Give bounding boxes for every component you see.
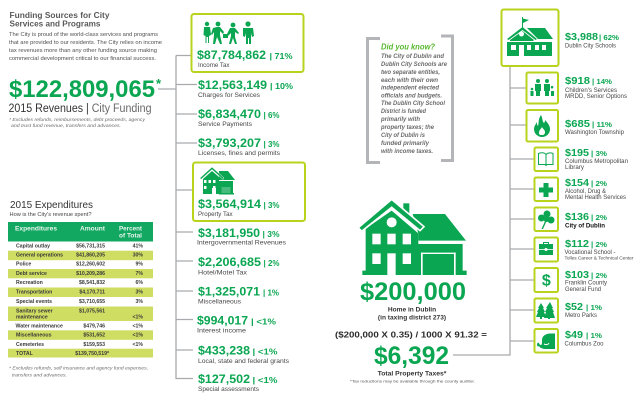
item: miscellaneous xyxy=(198,286,279,306)
row labels: TOTAL xyxy=(16,351,34,357)
row amounts: $1,075,561 xyxy=(79,308,105,314)
icon: shamrock xyxy=(538,210,554,229)
row labels xyxy=(16,244,63,357)
row labels: Special events xyxy=(16,299,52,305)
row labels: Sanitary sewer xyxy=(16,308,53,314)
item: service payments: Service Payments xyxy=(198,121,252,128)
row labels: Debt service xyxy=(16,271,47,277)
item: hotel motel tax: $2,206,685 xyxy=(198,256,262,269)
home description: Home in Dublin xyxy=(388,306,436,314)
item: children's services xyxy=(526,72,627,104)
property tax percent: | 3% xyxy=(264,200,280,210)
item: service payments: $6,834,470 xyxy=(198,108,261,121)
item: service payments xyxy=(198,108,280,128)
title: Services and Programs xyxy=(10,18,101,28)
icon: briefcase xyxy=(539,242,553,255)
item: interest income: $994,017 xyxy=(197,314,248,328)
total revenue figure: * xyxy=(156,76,162,91)
total property taxes value: $6,392 xyxy=(374,342,449,370)
callout body: each with their own xyxy=(381,78,438,84)
item: grants: $433,238 xyxy=(198,344,251,358)
icon: plus xyxy=(539,183,553,197)
row percents: 3% xyxy=(136,299,143,305)
revenue footnote: and trust fund revenue, transfers and advances. xyxy=(11,123,121,129)
property tax label: Property Tax xyxy=(198,211,234,218)
item: grants: | <1% xyxy=(252,346,278,356)
income tax percent: | 71% xyxy=(270,51,293,61)
item: charges for services: $12,563,149 xyxy=(198,79,268,92)
item: interest income xyxy=(197,314,276,334)
callout body: two separate entities, xyxy=(381,70,440,76)
row amounts: $10,209,286 xyxy=(76,271,105,277)
formula: ($200,000 X 0.35) / 1000 X 91.32 = xyxy=(335,330,487,340)
row percents: 9% xyxy=(136,262,143,268)
row percents: 41% xyxy=(133,244,143,250)
item: vocational school xyxy=(534,238,634,262)
item: dublin city schools: | 62% xyxy=(599,35,620,42)
row percents: 6% xyxy=(136,280,143,286)
item: metro parks: $52 xyxy=(565,302,583,313)
item: miscellaneous: Miscellaneous xyxy=(198,298,241,306)
expenditures heading xyxy=(10,199,93,218)
item: franklin county: General Fund xyxy=(565,286,602,293)
item: columbus metropolitan library: $195 xyxy=(565,148,589,159)
intro text block: tax revenues more than any other funding source making xyxy=(9,48,157,54)
panel: property tax xyxy=(193,162,305,221)
item: columbus metropolitan library: | 3% xyxy=(591,151,608,158)
row labels: Transportation xyxy=(16,290,52,296)
row labels: General operations xyxy=(16,252,63,258)
item: city of dublin: $136 xyxy=(565,212,589,223)
expenditures heading: How is the City's revenue spent? xyxy=(10,212,92,218)
callout heading: Did you know? xyxy=(381,42,435,52)
item: city of dublin: City of Dublin xyxy=(565,222,605,230)
item: charges for services: | 10% xyxy=(270,81,293,91)
item: special assessments: $127,502 xyxy=(198,373,250,386)
item: vocational school: $112 xyxy=(565,239,589,250)
item: alcohol drug mental health: | 2% xyxy=(591,181,608,188)
icon: elephant xyxy=(537,334,555,349)
icon: house xyxy=(200,167,235,194)
expenditures heading: 2015 Expenditures xyxy=(10,199,93,211)
item: columbus zoo xyxy=(534,329,604,352)
row labels: Capital outlay xyxy=(16,244,50,250)
row labels: Cemeteries xyxy=(16,342,44,348)
item: dublin city schools xyxy=(502,10,620,66)
item: charges for services: Charges for Services xyxy=(198,92,260,99)
revenue connector lines xyxy=(158,56,197,379)
row amounts: $159,553 xyxy=(83,342,105,348)
item: columbus metropolitan library: Columbus Metropolitan xyxy=(565,158,629,165)
intro text block: The City is proud of the world-class services and programs xyxy=(9,32,158,38)
item: special assessments xyxy=(198,373,278,393)
icon: large house xyxy=(358,199,467,275)
item: special assessments: | <1% xyxy=(252,375,278,385)
item: city of dublin xyxy=(534,208,608,231)
row labels: Recreation xyxy=(16,280,43,286)
item: metro parks: Metro Parks xyxy=(565,312,597,319)
item: alcohol drug mental health: Alcohol, Drug & xyxy=(565,188,607,195)
row labels: Miscellaneous xyxy=(16,332,52,338)
item: franklin county: $103 xyxy=(565,270,589,281)
item: vocational school: | 2% xyxy=(591,242,608,249)
item: children's services: $918 xyxy=(565,76,590,87)
item: hotel motel tax: | 2% xyxy=(264,258,280,268)
item: licenses: Licenses, fines and permits xyxy=(198,150,280,157)
row labels: maintenance xyxy=(16,314,48,320)
row amounts: $12,260,602 xyxy=(76,262,105,268)
revenue heading: 2015 Revenues | City Funding xyxy=(8,103,152,115)
title xyxy=(10,10,110,28)
item: intergovernmental: $3,181,950 xyxy=(198,227,260,240)
item: grants: Local, state and federal grants xyxy=(198,358,289,365)
item: hotel motel tax: Hotel/Motel Tax xyxy=(198,270,248,276)
item: charges for services xyxy=(198,79,293,99)
item: intergovernmental xyxy=(197,227,286,246)
callout body xyxy=(380,54,448,155)
row percents: <1% xyxy=(132,324,143,330)
row amounts: $41,860,205 xyxy=(76,252,105,258)
row percents: <1% xyxy=(132,342,143,348)
icon: flame xyxy=(534,115,550,137)
item: children's services: Children's Services xyxy=(565,87,617,94)
row amounts: $479,746 xyxy=(83,324,105,330)
item: washington township: | 11% xyxy=(592,122,613,129)
table header: of Total xyxy=(119,232,142,240)
item: dublin city schools: $3,988 xyxy=(565,32,598,43)
row amounts: $8,541,832 xyxy=(79,280,105,286)
table header: Amount xyxy=(80,226,106,232)
item: vocational school: Vocational School - xyxy=(564,249,616,256)
item: columbus zoo: Columbus Zoo xyxy=(564,340,604,348)
item: children's services: | 14% xyxy=(592,79,613,86)
item: intergovernmental: | 3% xyxy=(262,229,280,239)
item: washington township: Washington Township xyxy=(565,129,625,136)
item: metro parks: | 1% xyxy=(586,305,603,312)
property tax footnote: *Tax reductions may be available through the county auditor. xyxy=(350,378,475,384)
total property taxes label: Total Property Taxes* xyxy=(378,370,447,378)
item: metro parks xyxy=(534,298,603,322)
property tax amount: $3,564,914 xyxy=(198,198,262,211)
row percents: 3% xyxy=(136,290,143,296)
callout body: primarily with xyxy=(380,117,420,123)
row labels: Water maintenance xyxy=(16,324,63,330)
income tax label: Income Tax xyxy=(198,62,230,69)
callout body: officials and budgets. xyxy=(381,94,442,100)
total revenue figure: $122,809,065 xyxy=(9,76,155,103)
title: Funding Sources for City xyxy=(10,10,110,20)
callout body: property taxes; the xyxy=(380,125,435,131)
item: miscellaneous: $1,325,071 xyxy=(198,286,261,298)
table header: Percent xyxy=(119,226,143,232)
item: vocational school: Tolles Career & Technical Center xyxy=(564,256,634,260)
item: washington township xyxy=(526,110,625,142)
callout body: Dublin City Schools are xyxy=(381,62,448,68)
item: alcohol drug mental health: Mental Health Services xyxy=(565,194,626,201)
callout body: with income taxes. xyxy=(381,149,433,155)
row percents: 7% xyxy=(136,271,143,277)
item: washington township: $685 xyxy=(565,119,590,130)
item: city of dublin: | 2% xyxy=(591,215,608,222)
item: licenses: | 3% xyxy=(264,139,280,149)
item: interest income: Interest income xyxy=(197,328,247,334)
callout body: independent elected xyxy=(381,86,439,92)
icon: dollar sign: $ xyxy=(542,272,551,290)
row labels: Police xyxy=(16,262,31,268)
table header xyxy=(8,222,153,242)
item: alcohol drug mental health: $154 xyxy=(565,178,589,189)
item: franklin county xyxy=(534,268,608,293)
icon: book xyxy=(538,153,553,166)
row amounts: $3,710,655 xyxy=(79,299,105,305)
item: service payments: | 6% xyxy=(264,110,280,120)
expenditures footnote xyxy=(9,366,148,378)
row percents xyxy=(132,244,143,348)
item: licenses xyxy=(198,137,280,157)
row amounts: $531,652 xyxy=(83,332,105,338)
row percents: <1% xyxy=(132,332,143,338)
item: franklin county: | 2% xyxy=(591,273,608,280)
row percents: <1% xyxy=(132,314,143,320)
item: alcohol drug mental health xyxy=(534,178,626,201)
icon: school xyxy=(507,17,553,56)
expenditures footnote: * Excludes refunds, self insurance and agency fund expenses, xyxy=(9,366,148,372)
revenue footnote xyxy=(9,117,146,129)
item: children's services: MRDD, Senior Options xyxy=(565,93,627,100)
home description: (in taxing district 273) xyxy=(378,314,446,322)
callout body: The City of Dublin and xyxy=(381,54,444,60)
item: columbus metropolitan library: Library xyxy=(565,164,585,171)
item: miscellaneous: | 1% xyxy=(263,288,279,298)
intro text block xyxy=(9,32,162,62)
item: hotel motel tax xyxy=(198,256,280,276)
intro text block: that are provided to our residents. The City relies on income xyxy=(9,40,162,46)
home description xyxy=(378,306,446,322)
row percents: 30% xyxy=(133,252,143,258)
home value: $200,000 xyxy=(360,278,466,306)
item: licenses: $3,793,207 xyxy=(198,137,261,150)
icon: workers xyxy=(204,21,254,44)
expenditures table xyxy=(8,222,153,358)
row amounts: $4,170,711 xyxy=(79,290,105,296)
row amounts xyxy=(75,244,110,357)
table header: Expenditures xyxy=(15,226,58,232)
item: dublin city schools: Dublin City Schools xyxy=(565,42,616,50)
item: interest income: | <1% xyxy=(251,316,276,326)
row amounts: $56,731,315 xyxy=(76,244,105,250)
income tax amount: $87,784,862 xyxy=(197,49,266,62)
callout: did you know xyxy=(368,36,452,162)
item: grants xyxy=(198,344,289,365)
panel: income tax xyxy=(192,14,304,72)
item: intergovernmental: Intergovernmental Revenues xyxy=(197,240,286,246)
striped rows xyxy=(8,251,153,358)
icon: pine trees xyxy=(536,302,555,319)
item: franklin county: Franklin County xyxy=(565,280,608,286)
expenditures footnote: transfers and advances. xyxy=(12,372,67,378)
item: special assessments: Special assessments xyxy=(198,386,259,393)
revenue footnote: * Excludes refunds, reimbursements, debt proceeds, agency xyxy=(9,117,146,123)
row amounts: $139,750,519* xyxy=(75,351,110,357)
icon: family xyxy=(530,79,554,96)
callout body: City of Dublin is xyxy=(381,133,426,139)
callout body: District is funded xyxy=(381,109,426,115)
item: columbus metropolitan library xyxy=(534,148,629,171)
item: columbus zoo: $49 xyxy=(565,330,583,341)
property tax connector lines xyxy=(453,65,534,355)
item: columbus zoo: | 1% xyxy=(586,333,603,340)
callout body: funded primarily xyxy=(381,141,430,147)
intro text block: commercial development critical to our financial success. xyxy=(9,56,156,62)
callout body: The Dublin City School xyxy=(381,101,445,107)
